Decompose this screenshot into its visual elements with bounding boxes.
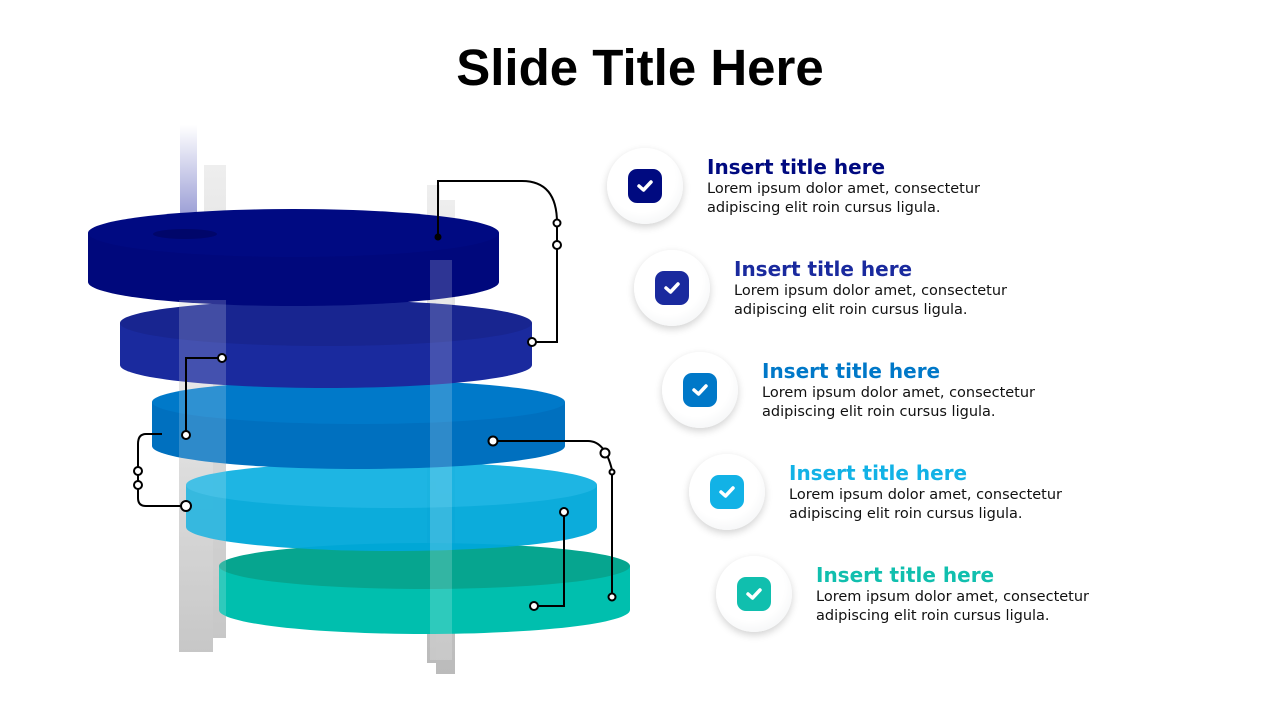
- text 3: [762, 359, 1035, 420]
- text 4: Lorem ipsum dolor amet, consectetur: [789, 487, 1062, 503]
- text 2: adipiscing elit roin cursus ligula.: [734, 302, 968, 318]
- text 3: Insert title here: [762, 359, 940, 383]
- icon 4: [689, 454, 765, 530]
- disk 2 royal blue: [120, 300, 532, 388]
- text 5: Insert title here: [816, 563, 994, 587]
- icon 1: [607, 148, 683, 224]
- text 5: Lorem ipsum dolor amet, consectetur: [816, 589, 1089, 605]
- text 4: Insert title here: [789, 461, 967, 485]
- icon 5: [716, 556, 792, 632]
- text 2: Lorem ipsum dolor amet, consectetur: [734, 283, 1007, 299]
- text 2: [734, 257, 1007, 318]
- text 5: [816, 563, 1089, 624]
- disk 5 teal: [219, 543, 630, 634]
- overlay bars: [179, 260, 452, 660]
- text 2: Insert title here: [734, 257, 912, 281]
- text 1: Insert title here: [707, 155, 885, 179]
- icon 2: [634, 250, 710, 326]
- item 4: [686, 456, 1062, 536]
- text 3: Lorem ipsum dolor amet, consectetur: [762, 385, 1035, 401]
- background bars: [179, 125, 455, 674]
- item 5: [713, 558, 1089, 638]
- text 1: Lorem ipsum dolor amet, consectetur: [707, 181, 980, 197]
- item 3: [659, 354, 1035, 434]
- disk 3 blue: [152, 380, 565, 469]
- title: Slide Title Here: [456, 39, 824, 96]
- text 4: adipiscing elit roin cursus ligula.: [789, 506, 1023, 522]
- text 5: adipiscing elit roin cursus ligula.: [816, 608, 1050, 624]
- text 1: [707, 155, 980, 216]
- item 2: [631, 252, 1007, 332]
- text 1: adipiscing elit roin cursus ligula.: [707, 200, 941, 216]
- circuit lines: [134, 181, 616, 610]
- text 4: [789, 461, 1062, 522]
- disk 4 light blue: [186, 462, 597, 551]
- disk 1 navy: [88, 209, 499, 306]
- text 3: adipiscing elit roin cursus ligula.: [762, 404, 996, 420]
- icon 3: [662, 352, 738, 428]
- item 1: [604, 150, 980, 230]
